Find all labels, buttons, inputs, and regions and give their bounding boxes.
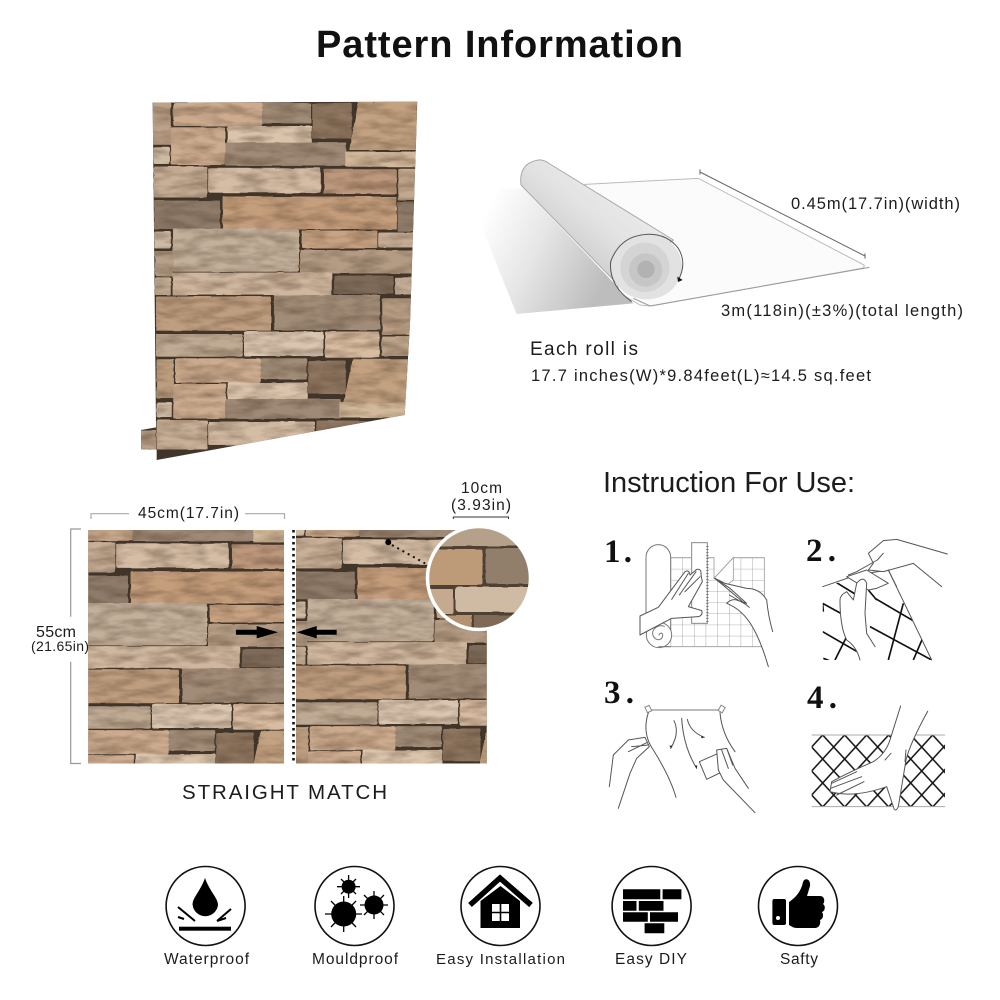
width measure: 45cm(17.7in) xyxy=(138,505,239,522)
roll size text: 17.7 inches(W)*9.84feet(L)≈14.5 sq.feet xyxy=(531,367,871,385)
height measure cm: 55cm xyxy=(36,624,76,641)
step 4 illustration xyxy=(812,706,945,810)
straight match caption: STRAIGHT MATCH xyxy=(182,781,387,804)
feature: mouldproof xyxy=(315,866,394,946)
step 2 illustration xyxy=(823,539,947,661)
step 3 illustration xyxy=(609,705,755,813)
wallpaper roll photo xyxy=(137,97,423,463)
panel: roll dimensions xyxy=(467,160,963,385)
zoom size line 2: (3.93in) xyxy=(451,497,511,514)
waterproof label: Waterproof xyxy=(164,951,250,968)
mouldproof label: Mouldproof xyxy=(312,951,399,968)
zoom pointer xyxy=(385,539,428,565)
width label: 0.45m(17.7in)(width) xyxy=(791,195,960,213)
height measure in: (21.65in) xyxy=(31,638,89,654)
zoom size bracket xyxy=(453,517,508,519)
length label: 3m(118in)(±3%)(total length) xyxy=(721,302,963,320)
zoom size line 1: 10cm xyxy=(461,480,502,497)
arrow left xyxy=(297,626,337,638)
easy diy label: Easy DIY xyxy=(615,951,687,968)
magnified circle xyxy=(426,528,529,632)
roll illustration xyxy=(467,160,869,314)
title: Pattern Information xyxy=(316,24,683,66)
panel: features xyxy=(164,866,838,968)
arrow right xyxy=(236,626,278,638)
number 2: 2 . xyxy=(806,533,836,569)
feature: easy installation xyxy=(461,866,540,946)
instruction heading: Instruction For Use: xyxy=(603,467,855,499)
feature: waterproof xyxy=(166,866,245,946)
panel: instructions xyxy=(604,533,947,813)
left wallpaper strip xyxy=(88,530,284,764)
right wallpaper strip xyxy=(296,530,487,764)
number 3: 3 . xyxy=(604,675,634,711)
safety label: Safty xyxy=(780,951,818,968)
width bracket xyxy=(91,514,284,519)
easy installation label: Easy Installation xyxy=(436,951,565,968)
roll size text heading: Each roll is xyxy=(530,339,638,360)
step 1 illustration xyxy=(640,543,773,667)
panel: straight match xyxy=(32,482,529,799)
seam dotted line xyxy=(292,530,295,764)
number 4: 4 . xyxy=(807,680,837,716)
number 1: 1 . xyxy=(604,534,632,570)
height bracket xyxy=(71,529,81,764)
feature: easy diy xyxy=(612,866,691,946)
feature: safety xyxy=(758,866,838,946)
